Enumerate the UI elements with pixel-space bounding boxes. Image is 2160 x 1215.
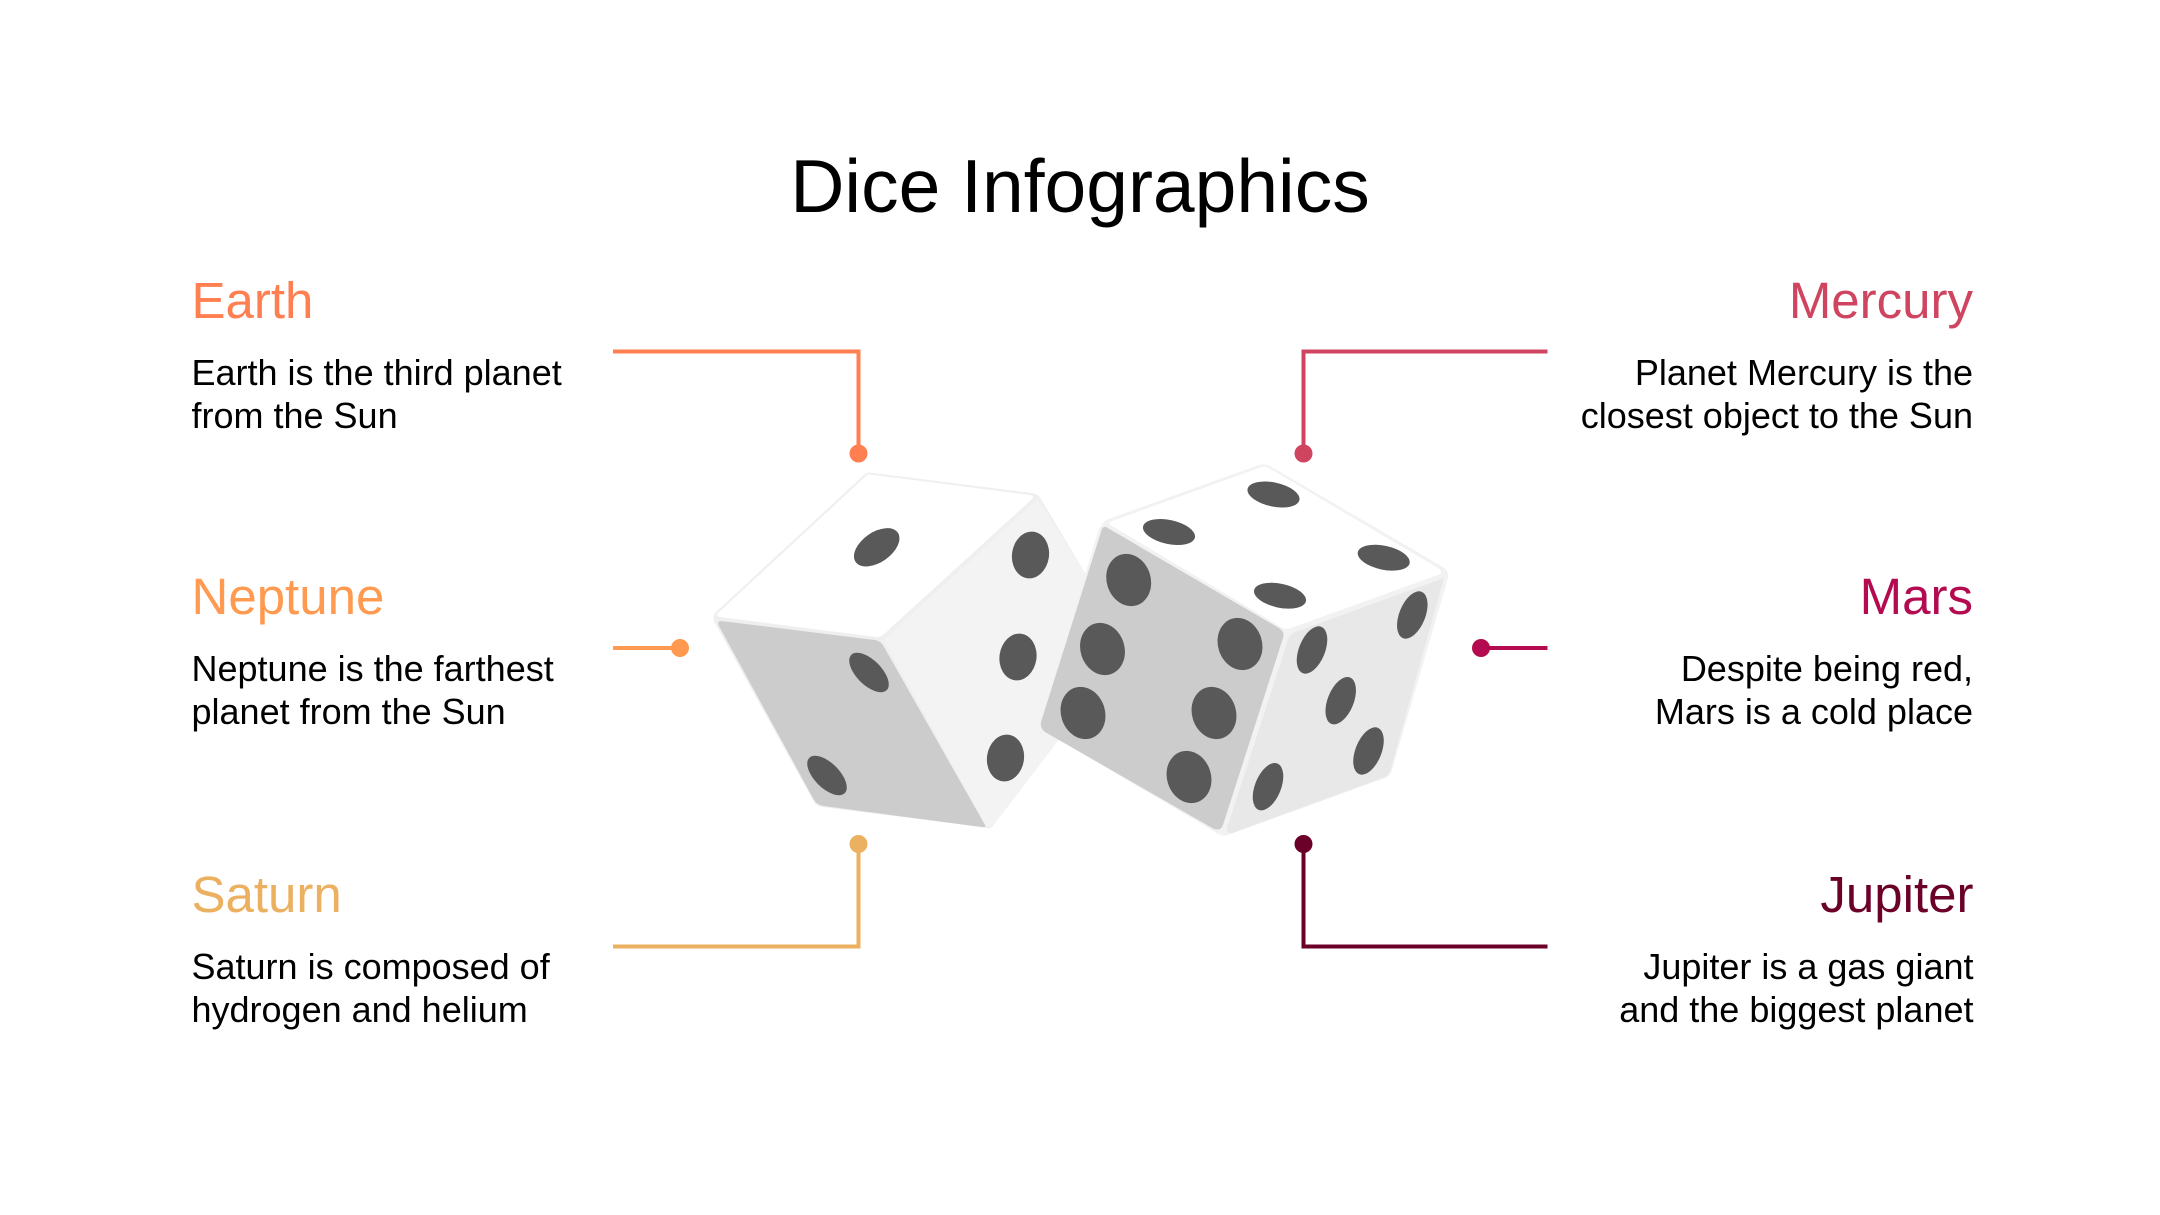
panel: Neptune (192, 568, 554, 732)
connector: Earth (613, 352, 868, 462)
heading: Neptune: Neptune (192, 568, 384, 625)
heading: Mercury: Mercury (1789, 272, 1973, 329)
panel: Mercury (1581, 272, 1973, 436)
left die top face (717, 474, 1033, 637)
text block: Earth: Earth is the third planet (192, 352, 562, 393)
text block: Jupiter: and the biggest planet (1619, 989, 1974, 1030)
text block: Earth: from the Sun (192, 395, 398, 436)
heading: Earth: Earth (192, 272, 313, 329)
text block: Mars: Despite being red, (1681, 648, 1973, 689)
left die silhouette (714, 472, 1120, 828)
text block: Saturn: hydrogen and helium (192, 989, 528, 1030)
panel: Saturn (192, 866, 551, 1030)
connector: Jupiter (1294, 835, 1548, 946)
connector: Mars (1472, 639, 1548, 657)
text block: Neptune: Neptune is the farthest (192, 648, 554, 689)
left die right face (884, 499, 1120, 827)
connector: Mercury (1294, 352, 1548, 462)
connector: Saturn (613, 835, 868, 946)
left die pips (800, 520, 1052, 802)
right die top face (1110, 466, 1441, 629)
right die silhouette (1041, 464, 1448, 836)
heading: Mars: Mars (1860, 568, 1973, 625)
heading: Saturn: Saturn (192, 866, 342, 923)
text block: Mercury: closest object to the Sun (1581, 395, 1973, 436)
text block: Neptune: planet from the Sun (192, 691, 506, 732)
icon: left die (714, 472, 1120, 828)
connector: Neptune (613, 639, 689, 657)
text block: Jupiter: Jupiter is a gas giant (1643, 946, 1974, 987)
right die pips (1054, 477, 1434, 815)
panel: Earth (192, 272, 562, 436)
right die right face (1227, 578, 1444, 833)
text block: Saturn: Saturn is composed of (192, 946, 550, 987)
title: Dice Infographics (790, 144, 1370, 228)
panel: Jupiter (1619, 866, 1974, 1030)
icon: right die (1041, 464, 1448, 836)
text block: Mars: Mars is a cold place (1655, 691, 1973, 732)
heading: Jupiter: Jupiter (1820, 866, 1974, 923)
text block: Mercury: Planet Mercury is the (1635, 352, 1973, 393)
right die left face (1041, 527, 1284, 830)
left die left face (718, 621, 985, 827)
panel: Mars (1655, 568, 1973, 732)
